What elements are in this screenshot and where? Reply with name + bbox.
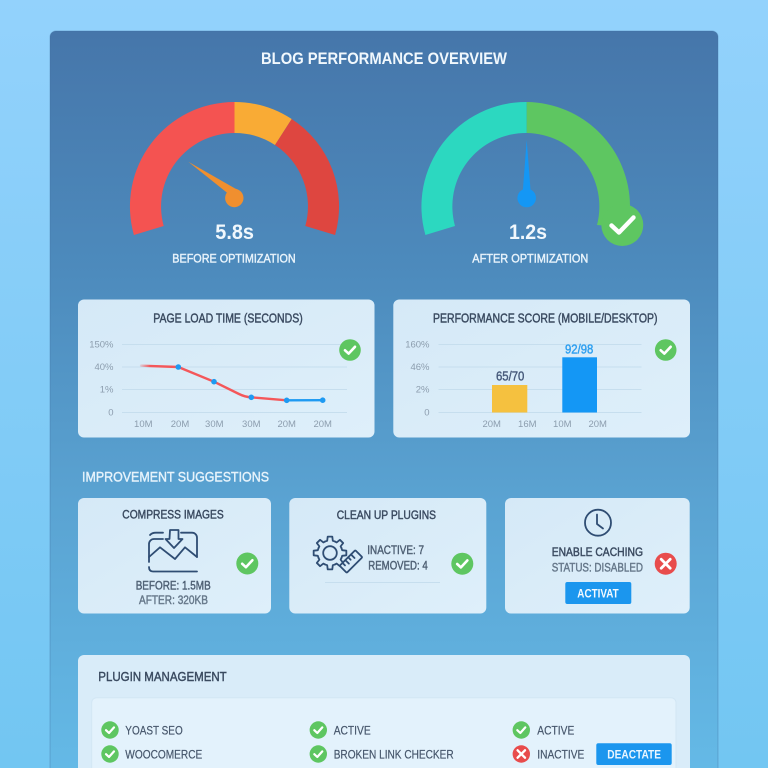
icon: check [451, 553, 473, 575]
value: 5.8s [215, 221, 254, 244]
x axis labels: 20M [588, 419, 607, 430]
y axis labels: 150% [89, 340, 114, 350]
gauge arc: red left segment [130, 102, 234, 235]
x axis labels: 16M [518, 419, 537, 430]
x axis labels [134, 419, 332, 430]
section heading: improvement suggestions: IMPROVEMENT SUGGESTIONS [82, 469, 269, 485]
bar: after score [562, 341, 597, 412]
y axis labels [89, 340, 114, 418]
icon: check [339, 339, 361, 361]
row: yoast seo [101, 721, 183, 739]
x axis labels: 30M [242, 419, 261, 430]
x axis labels: 20M [171, 419, 189, 430]
panel: clean up plugins [289, 498, 486, 614]
y axis labels: 46% [410, 362, 430, 373]
icon: error cross [655, 553, 677, 575]
gauge needle [188, 162, 244, 207]
panel heading: PLUGIN MANAGEMENT [98, 669, 227, 684]
title: BLOG PERFORMANCE OVERVIEW [261, 49, 508, 68]
x axis labels: 30M [205, 419, 224, 430]
inactive count: INACTIVE: 7 [367, 545, 424, 557]
chart title: PAGE LOAD TIME (SECONDS) [153, 312, 303, 326]
button: deactivate [596, 743, 672, 765]
gauge arc: teal segment [421, 102, 527, 235]
icon: clock [585, 510, 611, 536]
gauge arc: amber segment [234, 102, 292, 145]
row: active status [310, 721, 371, 739]
size before: BEFORE: 1.5MB [136, 580, 211, 592]
icon: gear and ruler [314, 537, 362, 573]
x axis labels [482, 419, 607, 430]
row: broken link checker: BROKEN LINK CHECKER [334, 750, 454, 762]
button: deactivate: DEACTATE [607, 750, 661, 762]
y axis labels: 2% [416, 384, 430, 396]
panel: compress images [78, 498, 271, 614]
gauge needle [517, 140, 536, 207]
bar: before score [492, 369, 527, 412]
icon: check [655, 339, 676, 361]
gauge label: AFTER OPTIMIZATION [472, 252, 588, 266]
y axis labels: 160% [405, 340, 430, 350]
row: woocomerce: WOOCOMERCE [125, 750, 203, 762]
panel: enable caching [505, 498, 690, 614]
chart title: PERFORMANCE SCORE (MOBILE/DESKTOP) [433, 312, 658, 326]
gauge: before optimization [130, 102, 339, 266]
x axis labels: 20M [482, 419, 501, 430]
row: broken link checker [310, 745, 454, 763]
card title: CLEAN UP PLUGINS [337, 510, 436, 522]
button: activate: ACTIVAT [577, 588, 619, 600]
gauge arc: dark red right segment [275, 119, 339, 235]
row: active status right: ACTIVE [537, 726, 575, 738]
status text: STATUS: DISABLED [552, 563, 643, 575]
y axis labels: 40% [94, 362, 114, 373]
gauge arc: green segment [527, 102, 630, 228]
row: active status: ACTIVE [334, 726, 371, 738]
panel: performance score chart [393, 300, 690, 438]
x axis labels: 20M [313, 419, 332, 430]
card title: ENABLE CACHING [552, 547, 643, 559]
line chart [141, 364, 326, 403]
icon: image download [149, 530, 197, 572]
card title: COMPRESS IMAGES [122, 510, 224, 522]
y axis labels: 0 [424, 408, 430, 418]
row: active status right [513, 721, 575, 739]
y axis labels [405, 340, 430, 418]
removed count: REMOVED: 4 [368, 560, 428, 572]
row: inactive status: INACTIVE [537, 750, 585, 762]
gauge: after optimization [421, 102, 643, 266]
panel: plugin management [78, 655, 690, 768]
gauge label: BEFORE OPTIMIZATION [172, 252, 296, 266]
bar: after score: 92/98 [565, 341, 593, 356]
icon: success check badge [601, 204, 643, 246]
size after: AFTER: 320KB [139, 595, 208, 607]
button: activate [565, 582, 631, 604]
x axis labels: 10M [134, 419, 153, 430]
icon: check [236, 552, 258, 574]
value: 1.2s [509, 221, 547, 244]
y axis labels: 1% [100, 384, 114, 396]
bar: before score: 65/70 [496, 369, 524, 384]
y axis labels: 0 [108, 408, 114, 418]
x axis labels: 10M [553, 419, 572, 430]
row: yoast seo: YOAST SEO [125, 726, 183, 738]
x axis labels: 20M [277, 419, 296, 430]
panel: page load time chart [78, 300, 374, 438]
row: inactive status [513, 745, 585, 763]
row: woocomerce [101, 745, 203, 763]
plugin list box [92, 698, 676, 768]
